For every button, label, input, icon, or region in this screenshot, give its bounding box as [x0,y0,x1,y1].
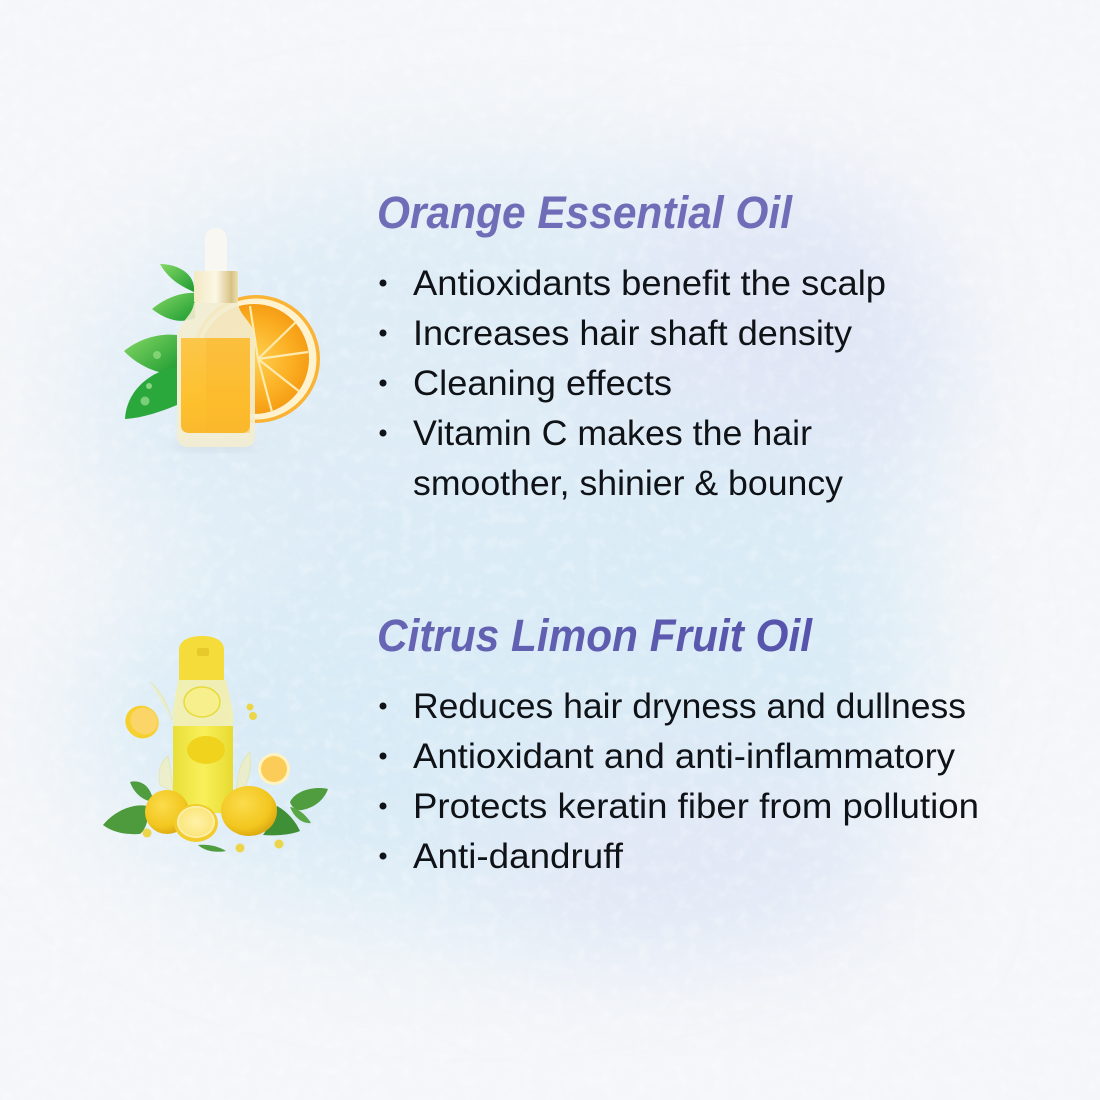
bottle cap [179,636,224,680]
icon: lemon bottle with fruit [103,636,328,852]
floating lemon left [119,699,165,745]
list: orange oil benefits: Vitamin C makes the hair [413,414,812,453]
list: orange oil benefits: Cleaning effects [413,364,672,403]
leaves [103,781,328,852]
list: orange oil benefits: smoother, shinier & bouncy [413,464,844,503]
bottle dropper [205,228,227,271]
droplets [142,704,284,852]
bottle liquid [173,726,233,813]
bottle oil [181,338,250,433]
lemon left [145,790,189,834]
list: citrus limon benefits: Anti-dandruff [413,837,623,876]
lemon cut [174,804,218,842]
list: citrus limon benefits [380,687,979,876]
list: orange oil benefits: Antioxidants benefit the scalp [413,264,886,303]
heading: Orange Essential Oil: Orange Essential Oil [377,187,793,238]
bottle glass [177,303,255,447]
list: citrus limon benefits: Reduces hair dryness and dullness [413,687,966,726]
section: Citrus Limon Fruit Oil [103,610,979,876]
lemon in liquid [187,736,225,764]
icon: green leaves [124,264,195,419]
list: citrus limon benefits: Protects keratin fiber from pollution [413,787,979,826]
list: citrus limon benefits: Antioxidant and anti-inflammatory [413,737,956,776]
lemon slice in bottle [184,687,220,717]
splash [150,682,251,797]
lemon right [221,786,277,836]
list: orange oil benefits [380,264,886,503]
icon: orange slice [192,295,320,423]
heading: Citrus Limon Fruit Oil: Citrus Limon Fruit Oil [377,610,813,661]
bottle body [173,680,233,813]
bottle collar [194,271,238,303]
list: orange oil benefits: Increases hair shaft density [413,314,853,353]
floating lemon right [258,753,290,785]
section: Orange Essential Oil [124,187,886,503]
icon: orange oil dropper bottle [124,228,320,450]
